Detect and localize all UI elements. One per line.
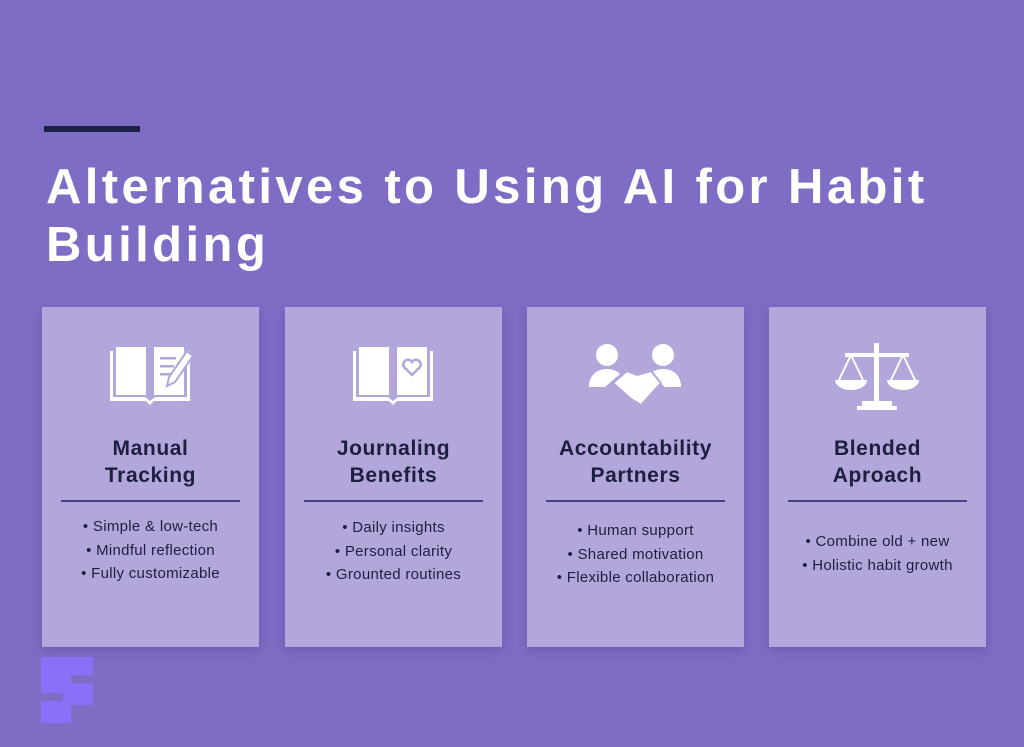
heading: Aproach	[833, 464, 922, 487]
bullet list	[81, 518, 220, 582]
icon: scales	[835, 343, 919, 410]
bullet list: • Flexible collaboration	[557, 569, 714, 586]
heading	[105, 437, 196, 487]
bullet list	[802, 533, 953, 574]
logo	[41, 657, 93, 723]
heading: Benefits	[350, 464, 437, 487]
title: Alternatives to Using AI for Habit Building	[46, 160, 928, 272]
bullet list: • Grounted routines	[326, 566, 461, 583]
panel: accountability	[527, 307, 744, 647]
bullet list	[557, 522, 714, 586]
heading	[559, 437, 712, 487]
bullet list: • Shared motivation	[567, 546, 704, 562]
bullet list: • Human support	[577, 522, 694, 539]
bullet list	[326, 519, 461, 583]
bullet list: • Daily insights	[342, 519, 445, 536]
bullet list: • Fully customizable	[81, 565, 220, 582]
heading: Blended	[834, 437, 921, 460]
heading: Journaling	[337, 437, 450, 460]
panel: blended	[769, 307, 986, 647]
heading: Tracking	[105, 464, 196, 487]
bullet list: • Simple & low-tech	[83, 518, 218, 535]
icon: book with pencil	[110, 347, 192, 405]
heading: Accountability	[559, 437, 712, 460]
panel: journaling	[285, 307, 502, 647]
bullet list: • Personal clarity	[335, 542, 452, 560]
panel: manual tracking	[42, 307, 259, 647]
heading	[337, 437, 450, 487]
accent bar	[44, 126, 140, 132]
bullet list: • Holistic habit growth	[802, 556, 953, 574]
icon: handshake	[589, 344, 681, 404]
heading: Partners	[590, 464, 680, 487]
heading: Manual	[113, 437, 188, 460]
heading	[833, 437, 922, 487]
icon: book with heart	[353, 347, 433, 405]
bullet list: • Mindful reflection	[86, 542, 215, 558]
bullet list: • Combine old + new	[806, 533, 949, 550]
